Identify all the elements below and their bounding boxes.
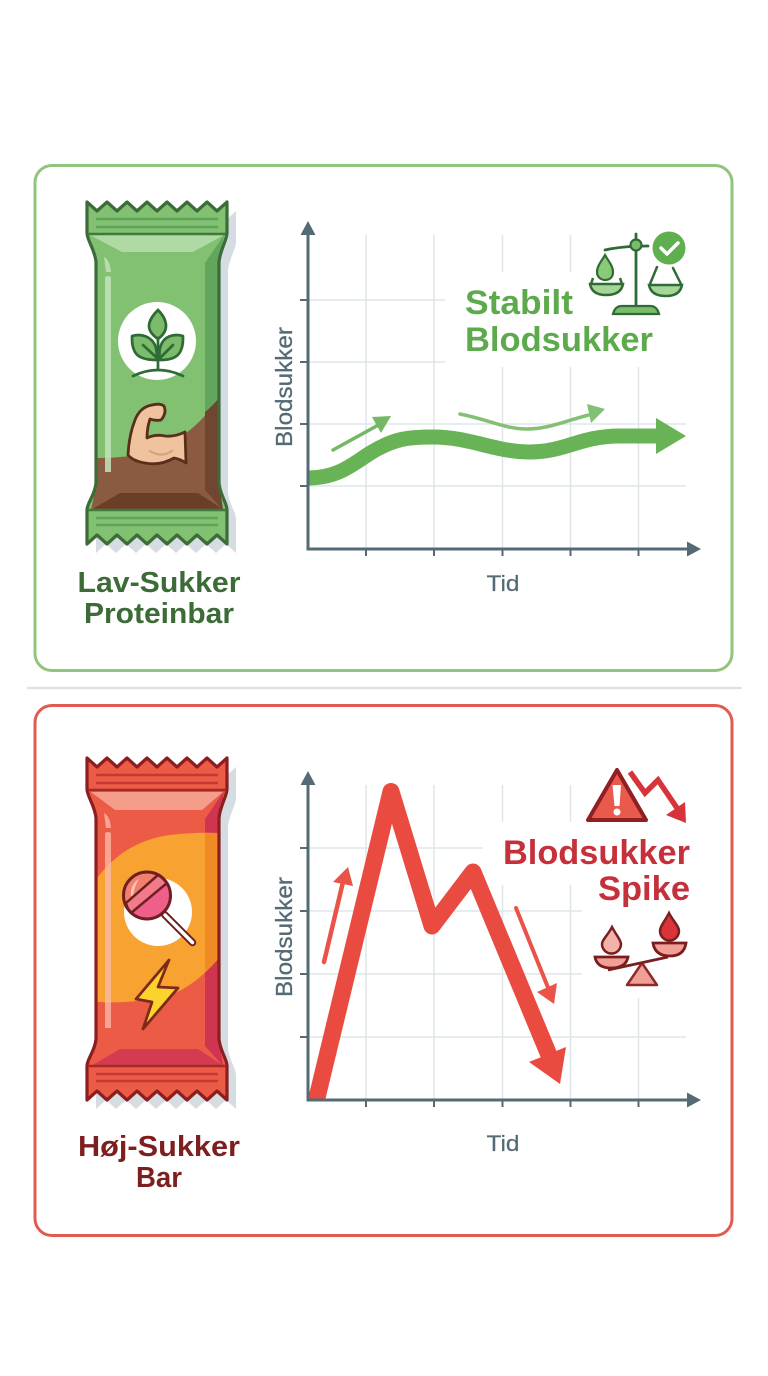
axis label: Blodsukker: Blodsukker — [271, 877, 297, 997]
arrow: small falling — [516, 908, 557, 1004]
arrow: small wave trend — [460, 404, 605, 429]
divider — [27, 687, 742, 689]
axis label: Tid: Tid — [486, 571, 520, 596]
axes — [300, 221, 701, 556]
axes — [300, 771, 701, 1108]
axis label: Blodsukker: Blodsukker — [271, 327, 297, 447]
arrow: small upward trend — [333, 416, 391, 450]
icon: red candy bar wrapper — [87, 758, 236, 1109]
title: Lav-Sukker Proteinbar: Lav-Sukker — [78, 567, 240, 599]
title: Høj-Sukker Bar: Høj-Sukker — [78, 1131, 240, 1163]
axis label: Tid: Tid — [486, 1131, 520, 1156]
panel: high sugar bar — [35, 706, 732, 1236]
icon: falling zigzag arrow — [630, 772, 686, 823]
panel frame: green — [35, 166, 732, 670]
panel: low sugar protein bar — [35, 166, 732, 670]
heading: Stabilt Blodsukker: Blodsukker — [465, 321, 653, 359]
heading: Stabilt Blodsukker: Stabilt — [465, 284, 573, 322]
icon: flexed arm — [128, 404, 186, 464]
title: Lav-Sukker Proteinbar: Proteinbar — [84, 598, 234, 630]
arrow: small rising — [324, 867, 353, 962]
line: stable curve with arrow — [308, 418, 686, 478]
icon: warning triangle — [588, 770, 646, 820]
line: spike curve with arrow — [314, 792, 566, 1110]
icon: lightning bolt — [136, 960, 178, 1029]
panel frame: red — [35, 706, 732, 1236]
chart: stable blood sugar — [271, 221, 701, 596]
icon: green protein bar wrapper — [87, 202, 236, 553]
icon: plant in white circle — [118, 302, 196, 380]
chart: blood sugar spike — [271, 771, 701, 1156]
heading: Blodsukker Spike: Blodsukker — [503, 834, 690, 872]
title: Høj-Sukker Bar: Bar — [136, 1162, 182, 1194]
icon: lollipop in white circle — [124, 872, 192, 946]
icon: balanced scale with check — [590, 232, 686, 314]
icon: tilted scale with drops — [595, 913, 686, 985]
heading: Blodsukker Spike: Spike — [598, 870, 690, 908]
